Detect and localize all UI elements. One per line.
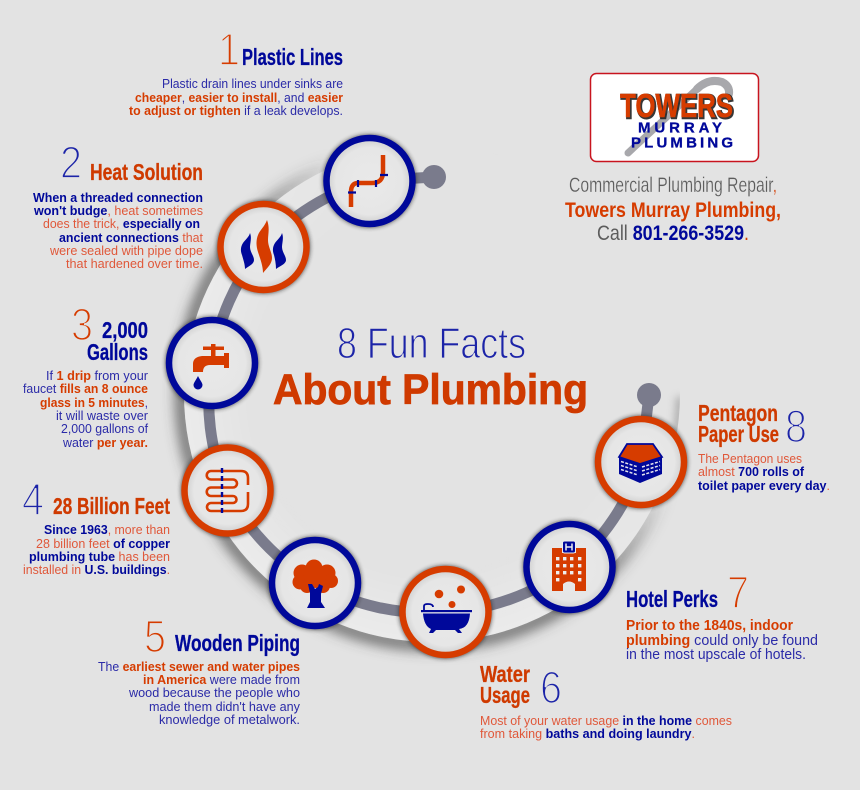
call to action: Towers Murray Plumbing, xyxy=(565,199,781,222)
fact 1: plastic lines: Plastic Lines xyxy=(242,44,343,70)
fact 1: plastic lines: 1 xyxy=(218,24,240,75)
fact 3: 2,000 gallons: water per year. xyxy=(62,435,148,450)
fact 3: 2,000 gallons: Gallons xyxy=(87,339,148,365)
fact 5: wooden piping: made them didn't have any xyxy=(149,699,300,714)
fact 2: heat solution: Heat Solution xyxy=(90,159,203,185)
fact 6: water usage: Water xyxy=(480,661,530,687)
logo: TOWERS xyxy=(620,87,733,124)
call to action: Commercial Plumbing Repair, xyxy=(569,174,777,197)
fact 4: 28 billion feet: 4 xyxy=(22,474,44,525)
fact 1: plastic lines: cheaper, easier to install, and easier xyxy=(135,90,343,105)
fact 8: pentagon paper use: toilet paper every day. xyxy=(698,478,830,493)
fact 6: water usage xyxy=(480,661,732,741)
fact 7: hotel perks xyxy=(626,567,818,663)
fact 8: pentagon paper use xyxy=(698,400,830,493)
fact 2: heat solution: won't budge, heat sometimes xyxy=(33,203,203,218)
fact 6: water usage: Usage xyxy=(480,682,530,708)
fact 3: 2,000 gallons xyxy=(23,299,149,450)
fact 7: hotel perks: Prior to the 1840s, indoor xyxy=(626,618,793,634)
fact 8: pentagon paper use: Paper Use xyxy=(698,421,779,447)
fact 3: 2,000 gallons: 3 xyxy=(71,299,93,350)
fact 5: wooden piping: in America were made from xyxy=(143,672,300,687)
fact 5: wooden piping: knowledge of metalwork. xyxy=(159,712,300,727)
fact 2: heat solution: that hardened over time. xyxy=(66,256,203,271)
fact 1: plastic lines xyxy=(129,24,343,118)
call to action xyxy=(565,174,781,245)
circle 5: tree icon xyxy=(268,536,362,630)
fact 5: wooden piping: Wooden Piping xyxy=(175,630,300,656)
circle 7: hotel icon xyxy=(523,520,616,614)
fact 2: heat solution: does the trick, especially on xyxy=(43,216,200,231)
pipe connecting the eight facts xyxy=(209,165,661,613)
fact 5: wooden piping: The earliest sewer and water pipes xyxy=(98,659,300,674)
fact 4: 28 billion feet: 28 Billion Feet xyxy=(53,493,170,519)
fact 4: 28 billion feet: 28 billion feet of copper xyxy=(36,536,170,551)
fact 6: water usage: 6 xyxy=(540,662,562,713)
fact 4: 28 billion feet: Since 1963, more than xyxy=(44,522,170,537)
fact 3: 2,000 gallons: 2,000 gallons of xyxy=(61,421,148,436)
fact 3: 2,000 gallons: 2,000 xyxy=(102,317,148,343)
curved backdrop with shadow xyxy=(182,144,682,644)
title: About Plumbing xyxy=(273,366,588,414)
fact 2: heat solution: 2 xyxy=(60,137,82,188)
fact 4: 28 billion feet xyxy=(22,474,170,577)
fact 5: wooden piping: wood because the people who xyxy=(128,685,300,700)
fact 1: plastic lines: Plastic drain lines under sinks are xyxy=(162,76,343,91)
fact 2: heat solution: were sealed with pipe dope xyxy=(49,243,203,258)
fact 7: hotel perks: Hotel Perks xyxy=(626,586,718,612)
logo xyxy=(590,74,758,162)
fact 3: 2,000 gallons: If 1 drip from your xyxy=(46,368,149,383)
fact 8: pentagon paper use: almost 700 rolls of xyxy=(698,464,805,479)
fact 3: 2,000 gallons: it will waste over xyxy=(56,408,149,423)
circle 3: faucet icon xyxy=(166,316,258,410)
circle 2: flames icon xyxy=(217,200,310,294)
circle 4: copper coil icon xyxy=(181,444,274,537)
circle 8: pentagon building icon xyxy=(594,416,688,508)
fact 7: hotel perks: 7 xyxy=(727,567,749,618)
fact 7: hotel perks: in the most upscale of hotels. xyxy=(626,647,806,663)
fact 2: heat solution: When a threaded connection xyxy=(33,190,203,205)
fact 8: pentagon paper use: The Pentagon uses xyxy=(698,451,802,466)
fact 7: hotel perks: plumbing could only be found xyxy=(626,633,818,649)
fact 8: pentagon paper use: 8 xyxy=(785,401,807,452)
fact 4: 28 billion feet: plumbing tube has been xyxy=(29,549,170,564)
circle 1: pipe icon xyxy=(323,134,416,228)
circle 6: bathtub icon xyxy=(399,566,492,658)
logo: MURRAY xyxy=(638,120,722,136)
title xyxy=(273,319,588,414)
logo: PLUMBING xyxy=(631,134,733,152)
fact 3: 2,000 gallons: glass in 5 minutes, xyxy=(40,395,148,410)
fact 6: water usage: from taking baths and doing laundry. xyxy=(480,726,695,741)
fact 8: pentagon paper use: Pentagon xyxy=(698,400,778,426)
fact 4: 28 billion feet: installed in U.S. buildings. xyxy=(23,562,170,577)
fact 5: wooden piping xyxy=(98,611,300,727)
fact 2: heat solution xyxy=(33,137,203,271)
fact 5: wooden piping: 5 xyxy=(144,611,166,662)
call to action: Call 801-266-3529. xyxy=(597,222,749,245)
fact 2: heat solution: ancient connections that xyxy=(59,230,203,245)
fact 6: water usage: Most of your water usage in the home comes xyxy=(480,713,732,728)
fact 3: 2,000 gallons: faucet fills an 8 ounce xyxy=(23,381,148,396)
title: 8 Fun Facts xyxy=(337,319,526,368)
logo: TOWERS xyxy=(621,88,734,125)
fact 1: plastic lines: to adjust or tighten if a leak develops. xyxy=(129,103,343,118)
icon: wrench xyxy=(628,81,729,153)
